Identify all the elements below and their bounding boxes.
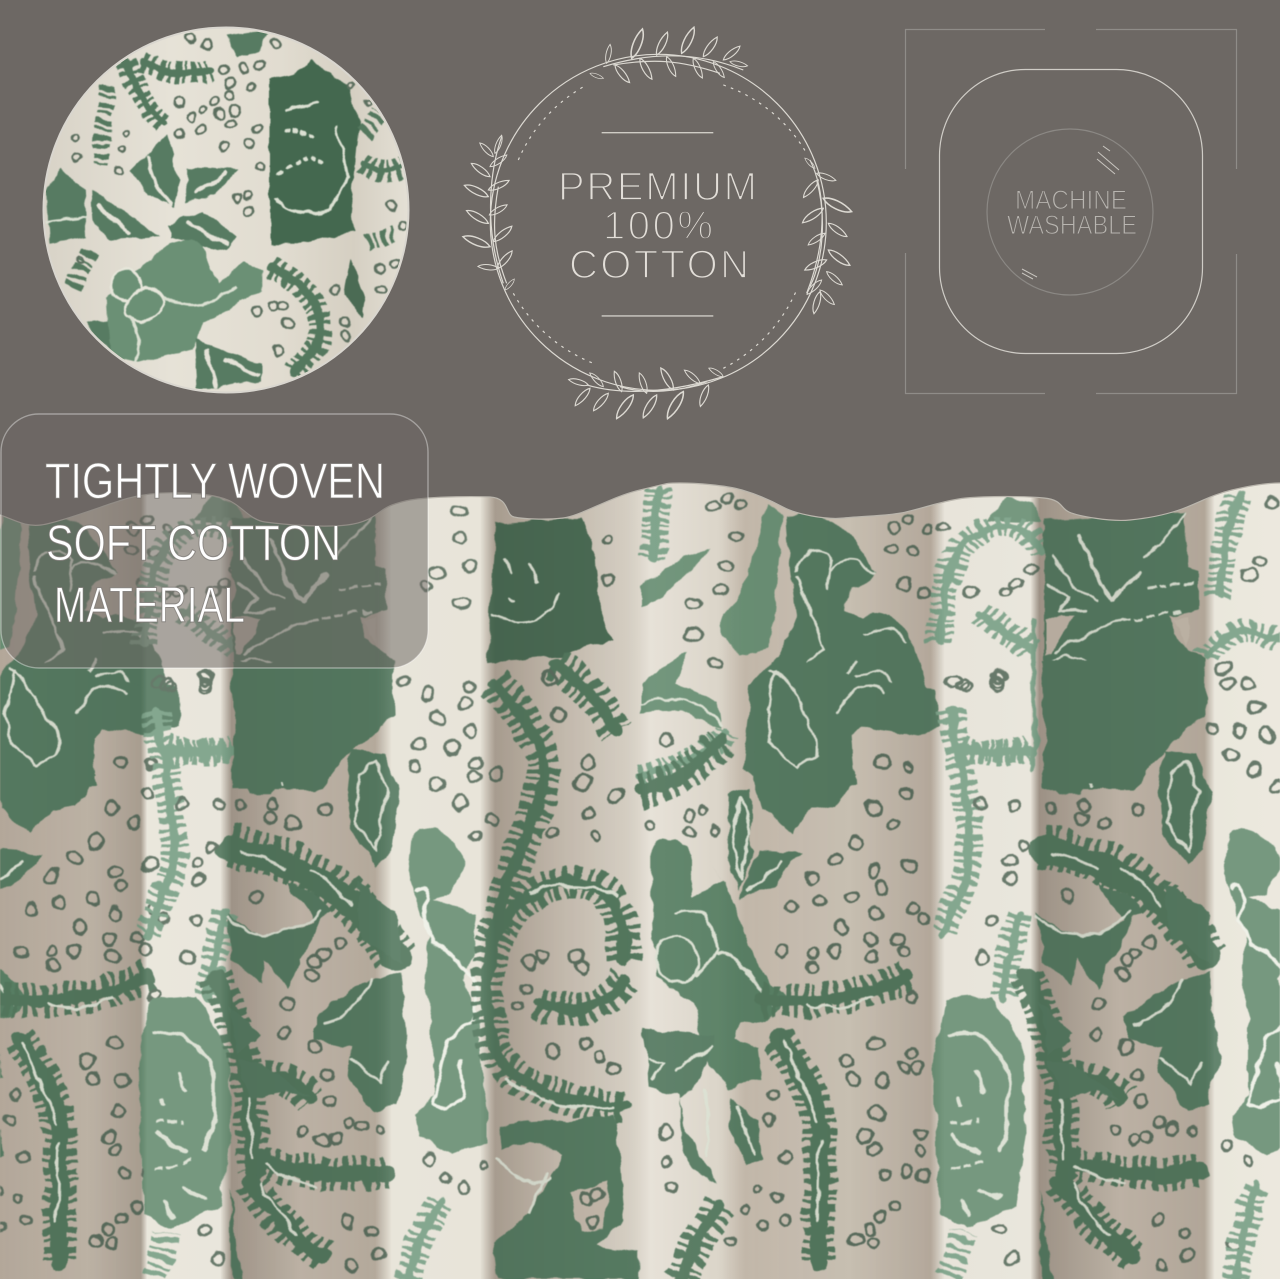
badge text: COTTON bbox=[569, 243, 749, 287]
rounded square bbox=[940, 70, 1202, 354]
badge text bbox=[558, 165, 757, 287]
pleat shading bbox=[0, 470, 1280, 1279]
callout text bbox=[45, 453, 385, 633]
curtain photo bbox=[0, 470, 1280, 1279]
washable text: WASHABLE bbox=[1007, 210, 1137, 240]
corner frame bbox=[906, 30, 1236, 394]
panel: tightly woven callout bbox=[1, 414, 428, 668]
callout text: SOFT COTTON bbox=[46, 515, 341, 571]
curtain top edge bbox=[0, 483, 1280, 526]
inner circle bbox=[987, 129, 1153, 295]
callout text: MATERIAL bbox=[54, 577, 245, 633]
cotton badge bbox=[462, 26, 853, 420]
washable text: MACHINE bbox=[1015, 185, 1127, 215]
callout text: TIGHTLY WOVEN bbox=[45, 453, 385, 509]
machine washable badge bbox=[906, 30, 1236, 394]
washable text bbox=[1007, 185, 1137, 240]
glare strokes bbox=[1022, 146, 1119, 279]
badge text: 100% bbox=[603, 204, 713, 248]
upper dark flower and wreath section bbox=[399, 493, 1280, 1279]
fabric swatch circle bbox=[44, 28, 408, 392]
badge text: PREMIUM bbox=[558, 165, 757, 209]
badge wreath bbox=[462, 26, 853, 420]
